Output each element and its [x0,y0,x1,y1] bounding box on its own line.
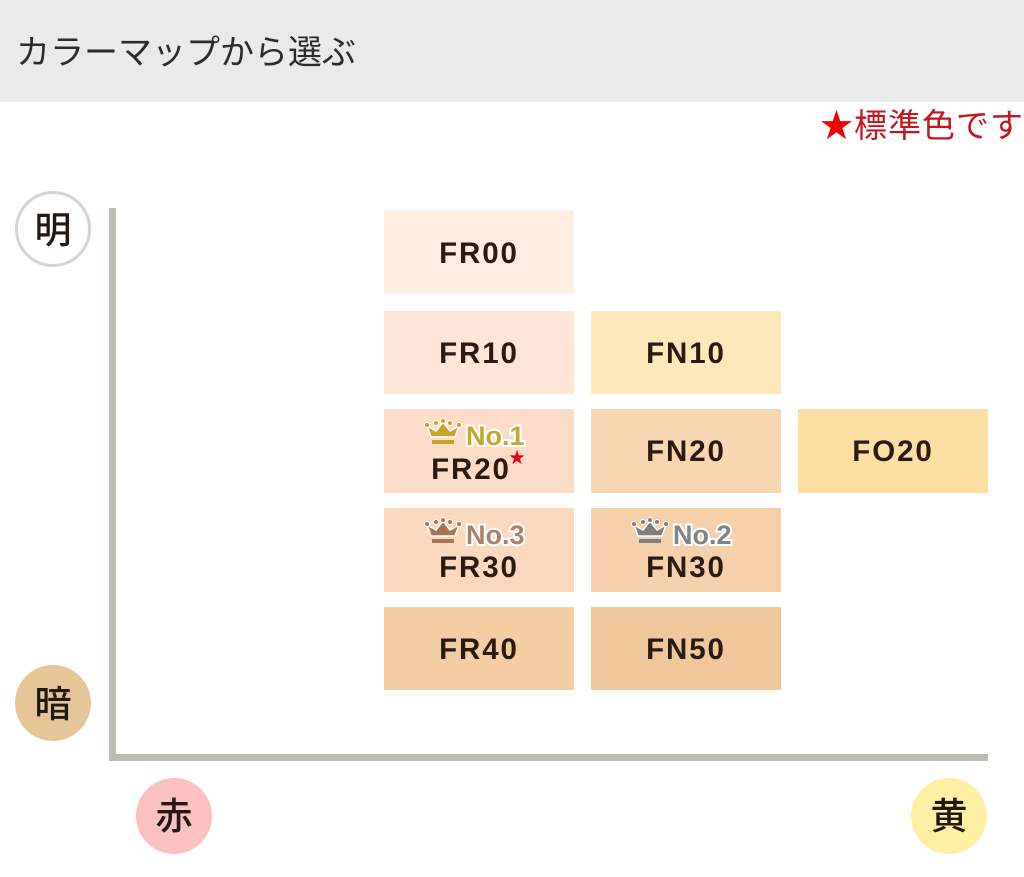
icon: gold crown [424,418,462,444]
code FN30: FN30 [646,551,726,584]
swatch FN20: FN20 [646,435,726,468]
swatch FN10 [591,311,781,394]
icon: red star: ★ [509,450,525,467]
header bar [0,0,1024,102]
heading: カラーマップから選ぶ [16,34,356,72]
swatch FO20: FO20 [852,435,934,468]
swatch FN30 No.2 [591,508,781,592]
swatch FR40 [384,607,574,690]
swatch FN20 [591,409,781,493]
swatch FR10 [384,311,574,394]
axis label: yellow [911,778,987,854]
swatch FR40: FR40 [439,633,519,666]
icon: silver crown [631,517,669,543]
code FR20: FR20 [431,453,511,486]
swatch FR20 No.1 [384,409,574,493]
legend: standard colour note: ★標準色です [820,107,1024,144]
swatch FR10: FR10 [439,337,519,370]
code FR30: FR30 [439,551,519,584]
swatch FR00: FR00 [439,237,519,270]
vertical axis [109,208,116,761]
rank: No.2: No.2 [673,520,732,550]
rank: No.1: No.1 [466,421,525,451]
axis label: red: 赤 [156,796,192,837]
axis label: bright: 明 [34,210,72,251]
horizontal axis [109,754,988,761]
swatch FO20 [798,409,988,493]
axis label: bright [15,191,91,267]
axis label: dark [15,665,91,741]
swatch FR30 No.3 [384,508,574,592]
axis label: dark: 暗 [34,684,72,725]
swatch FN50 [591,607,781,690]
swatch FN10: FN10 [646,337,726,370]
axis label: red [136,778,212,854]
axis label: yellow: 黄 [930,796,968,837]
swatch FR00 [384,210,574,294]
swatch FN50: FN50 [646,633,726,666]
rank: No.3: No.3 [466,520,525,550]
icon: bronze crown [424,517,462,543]
